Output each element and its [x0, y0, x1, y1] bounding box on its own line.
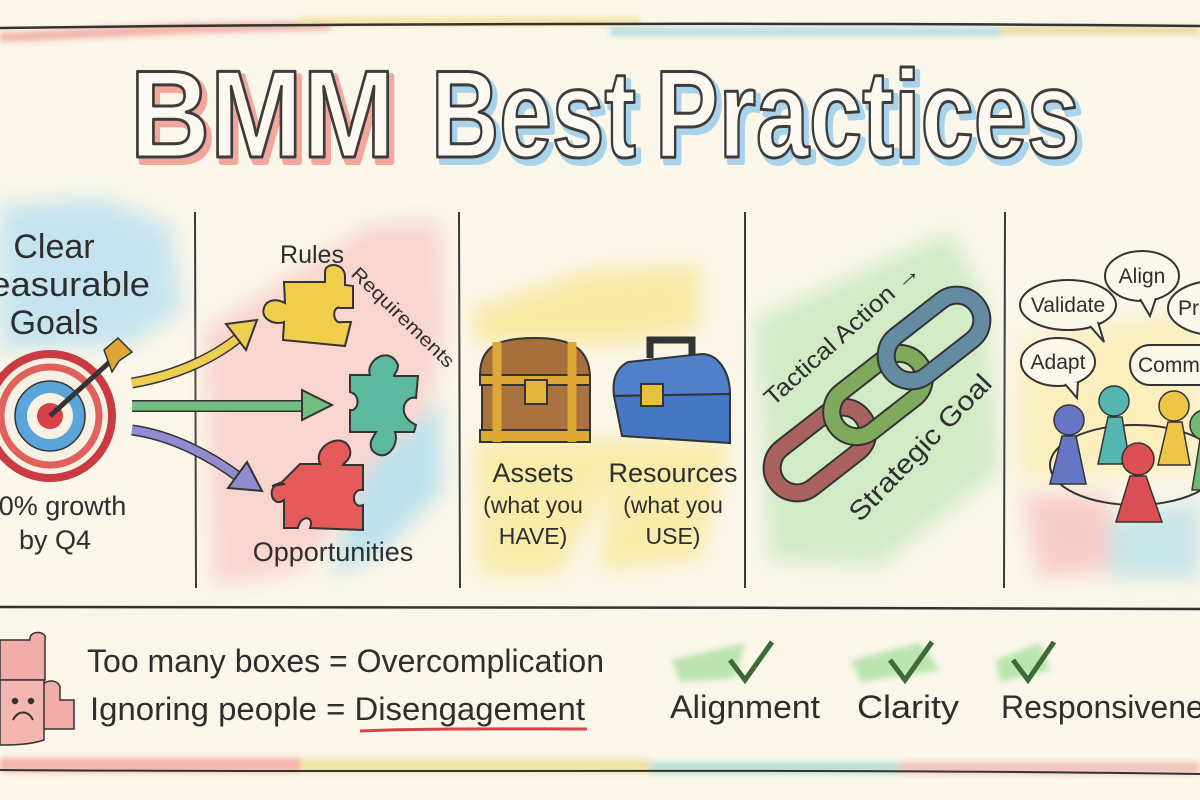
icon: target with arrow: [0, 338, 132, 478]
icon: yellow puzzle: [263, 265, 353, 346]
text: resources: USE): [646, 523, 700, 549]
check: alignment: [670, 642, 820, 725]
title word: BMM: BMM: [134, 51, 399, 189]
label: rules: Rules: [280, 241, 344, 269]
text: growth target: by Q4: [19, 525, 91, 555]
title word: Best: Best: [431, 46, 636, 184]
text: pitfalls: Ignoring people = Disengagement: [90, 691, 585, 727]
text: assets: Assets: [492, 458, 574, 488]
check: responsiveness: [996, 642, 1200, 725]
wash: yellow: [470, 265, 730, 575]
icon: chain: [762, 285, 992, 503]
text: resources: Resources: [608, 458, 738, 488]
wash: yellow, pink and blue: [1020, 310, 1200, 578]
speech bubble: validate: Validate: [1031, 294, 1105, 317]
discussion circle: [1050, 425, 1200, 505]
panel: chain links: [755, 232, 1000, 565]
icon: red puzzle: [272, 441, 363, 530]
text: growth target: [0, 491, 126, 555]
title word: BMM: BMM: [130, 46, 395, 184]
title word: Practices: Practices: [659, 51, 1084, 189]
panel: assets and resources: [470, 265, 738, 575]
text: pitfalls: [87, 643, 604, 727]
wash: blue: [0, 198, 182, 350]
title word: Best: Best: [435, 51, 640, 189]
arrow: purple: [132, 430, 240, 478]
arrow: green: [132, 400, 305, 412]
heading: clear measurable goals: [0, 228, 150, 342]
text: assets: [483, 458, 583, 549]
panel: puzzle pieces: [132, 222, 458, 585]
label: opportunities: Opportunities: [253, 537, 413, 567]
icon: toolbox: [614, 340, 730, 443]
panel: people and feedback: [1020, 251, 1200, 578]
panel: goals: [0, 198, 182, 555]
text: pitfalls: Too many boxes = Overcomplication: [87, 643, 604, 679]
speech bubble: validate: [1020, 280, 1116, 342]
check: alignment: Alignment: [670, 689, 820, 725]
speech bubble: align: [1105, 251, 1179, 316]
top border band: [0, 17, 1200, 42]
wash: green: [755, 232, 1000, 565]
check: clarity: Clarity: [857, 689, 959, 725]
icon: green puzzle: [350, 355, 418, 455]
person: blue: [1050, 405, 1086, 484]
wash: pink and blue: [205, 222, 445, 585]
text: resources: (what you: [623, 492, 723, 518]
title: [130, 46, 1084, 189]
speech bubble: adapt: Adapt: [1031, 351, 1086, 374]
underline: disengagement: [360, 729, 587, 731]
heading: clear measurable goals: Goals: [10, 304, 98, 342]
speech bubble: prioritize: [1168, 281, 1200, 335]
speech bubble: align: Align: [1119, 265, 1165, 288]
person: teal: [1098, 386, 1130, 464]
text: assets: (what you: [483, 492, 583, 518]
check: clarity: [852, 642, 959, 725]
title word: Practices: Practices: [655, 46, 1080, 184]
bottom border band: [0, 758, 1200, 774]
icon: treasure chest: [480, 338, 590, 442]
bottom divider: [0, 607, 1200, 609]
label: requirements: Requirements: [347, 263, 458, 372]
divider: [744, 212, 746, 588]
person: yellow: [1158, 391, 1190, 465]
person: red: [1116, 443, 1162, 522]
icon: sad puzzle stack: [0, 632, 74, 745]
speech bubble: communicate: [1130, 345, 1200, 385]
divider: [459, 212, 460, 588]
text: resources: [608, 458, 738, 549]
person: green: [1190, 410, 1200, 490]
divider: [195, 212, 196, 588]
label: strategic goal: Strategic Goal: [843, 368, 998, 527]
arrow: yellow: [132, 332, 245, 383]
heading: clear measurable goals: Clear: [13, 228, 95, 266]
label: tactical action: Tactical Action →: [759, 258, 926, 411]
speech bubble: adapt: [1021, 338, 1095, 398]
text: assets: HAVE): [499, 523, 567, 549]
divider: [1004, 212, 1005, 588]
